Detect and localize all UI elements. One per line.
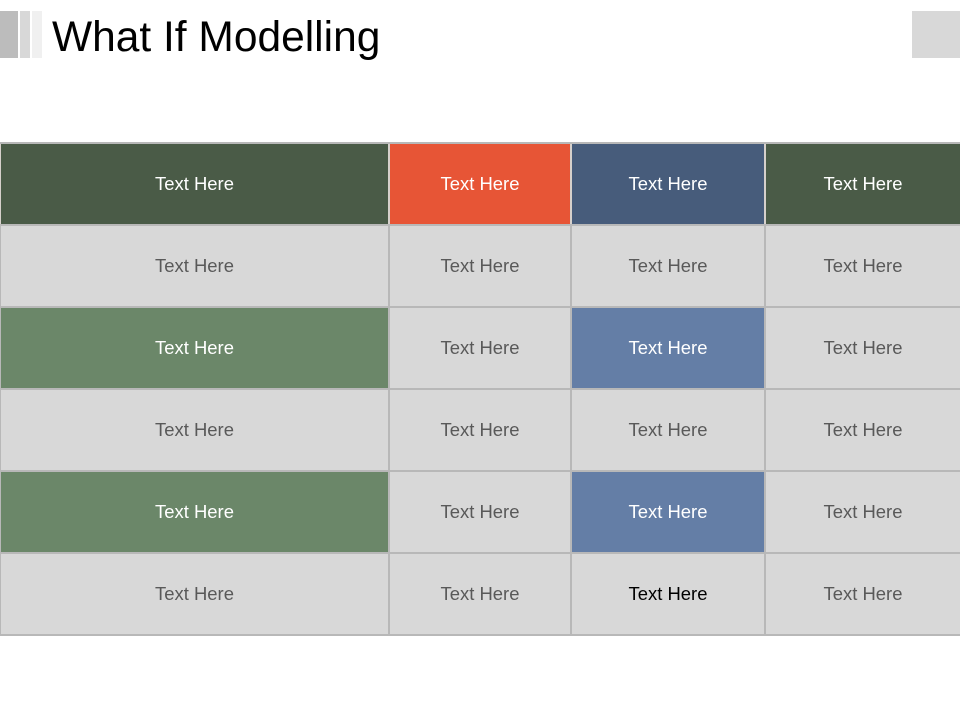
table: Text Here bbox=[824, 173, 902, 194]
table: Text Here bbox=[155, 501, 234, 522]
table: Text Here bbox=[629, 337, 707, 358]
table: Text Here bbox=[629, 255, 707, 276]
table: Text Here bbox=[155, 255, 234, 276]
table: Text Here bbox=[441, 583, 519, 604]
table: Text Here bbox=[155, 583, 234, 604]
table: Text Here bbox=[824, 501, 902, 522]
title: What If Modelling bbox=[52, 14, 380, 61]
table: Text Here bbox=[441, 173, 519, 194]
table: Text Here bbox=[629, 419, 707, 440]
table: Text Here bbox=[629, 501, 707, 522]
table: Text Here bbox=[441, 419, 519, 440]
table: Text Here bbox=[824, 337, 902, 358]
table: Text Here bbox=[629, 173, 707, 194]
table: Text Here bbox=[441, 337, 519, 358]
icon: title accent bars bbox=[0, 11, 42, 58]
table: Text Here bbox=[824, 255, 902, 276]
table: Text Here bbox=[155, 337, 234, 358]
corner block bbox=[912, 11, 960, 58]
table: Text Here bbox=[441, 255, 519, 276]
table: Text Here bbox=[824, 419, 902, 440]
table: Text Here bbox=[155, 173, 234, 194]
table: Text Here bbox=[629, 583, 707, 604]
table: Text Here bbox=[155, 419, 234, 440]
table: Text Here bbox=[824, 583, 902, 604]
table: Text Here bbox=[441, 501, 519, 522]
table bbox=[0, 142, 960, 636]
